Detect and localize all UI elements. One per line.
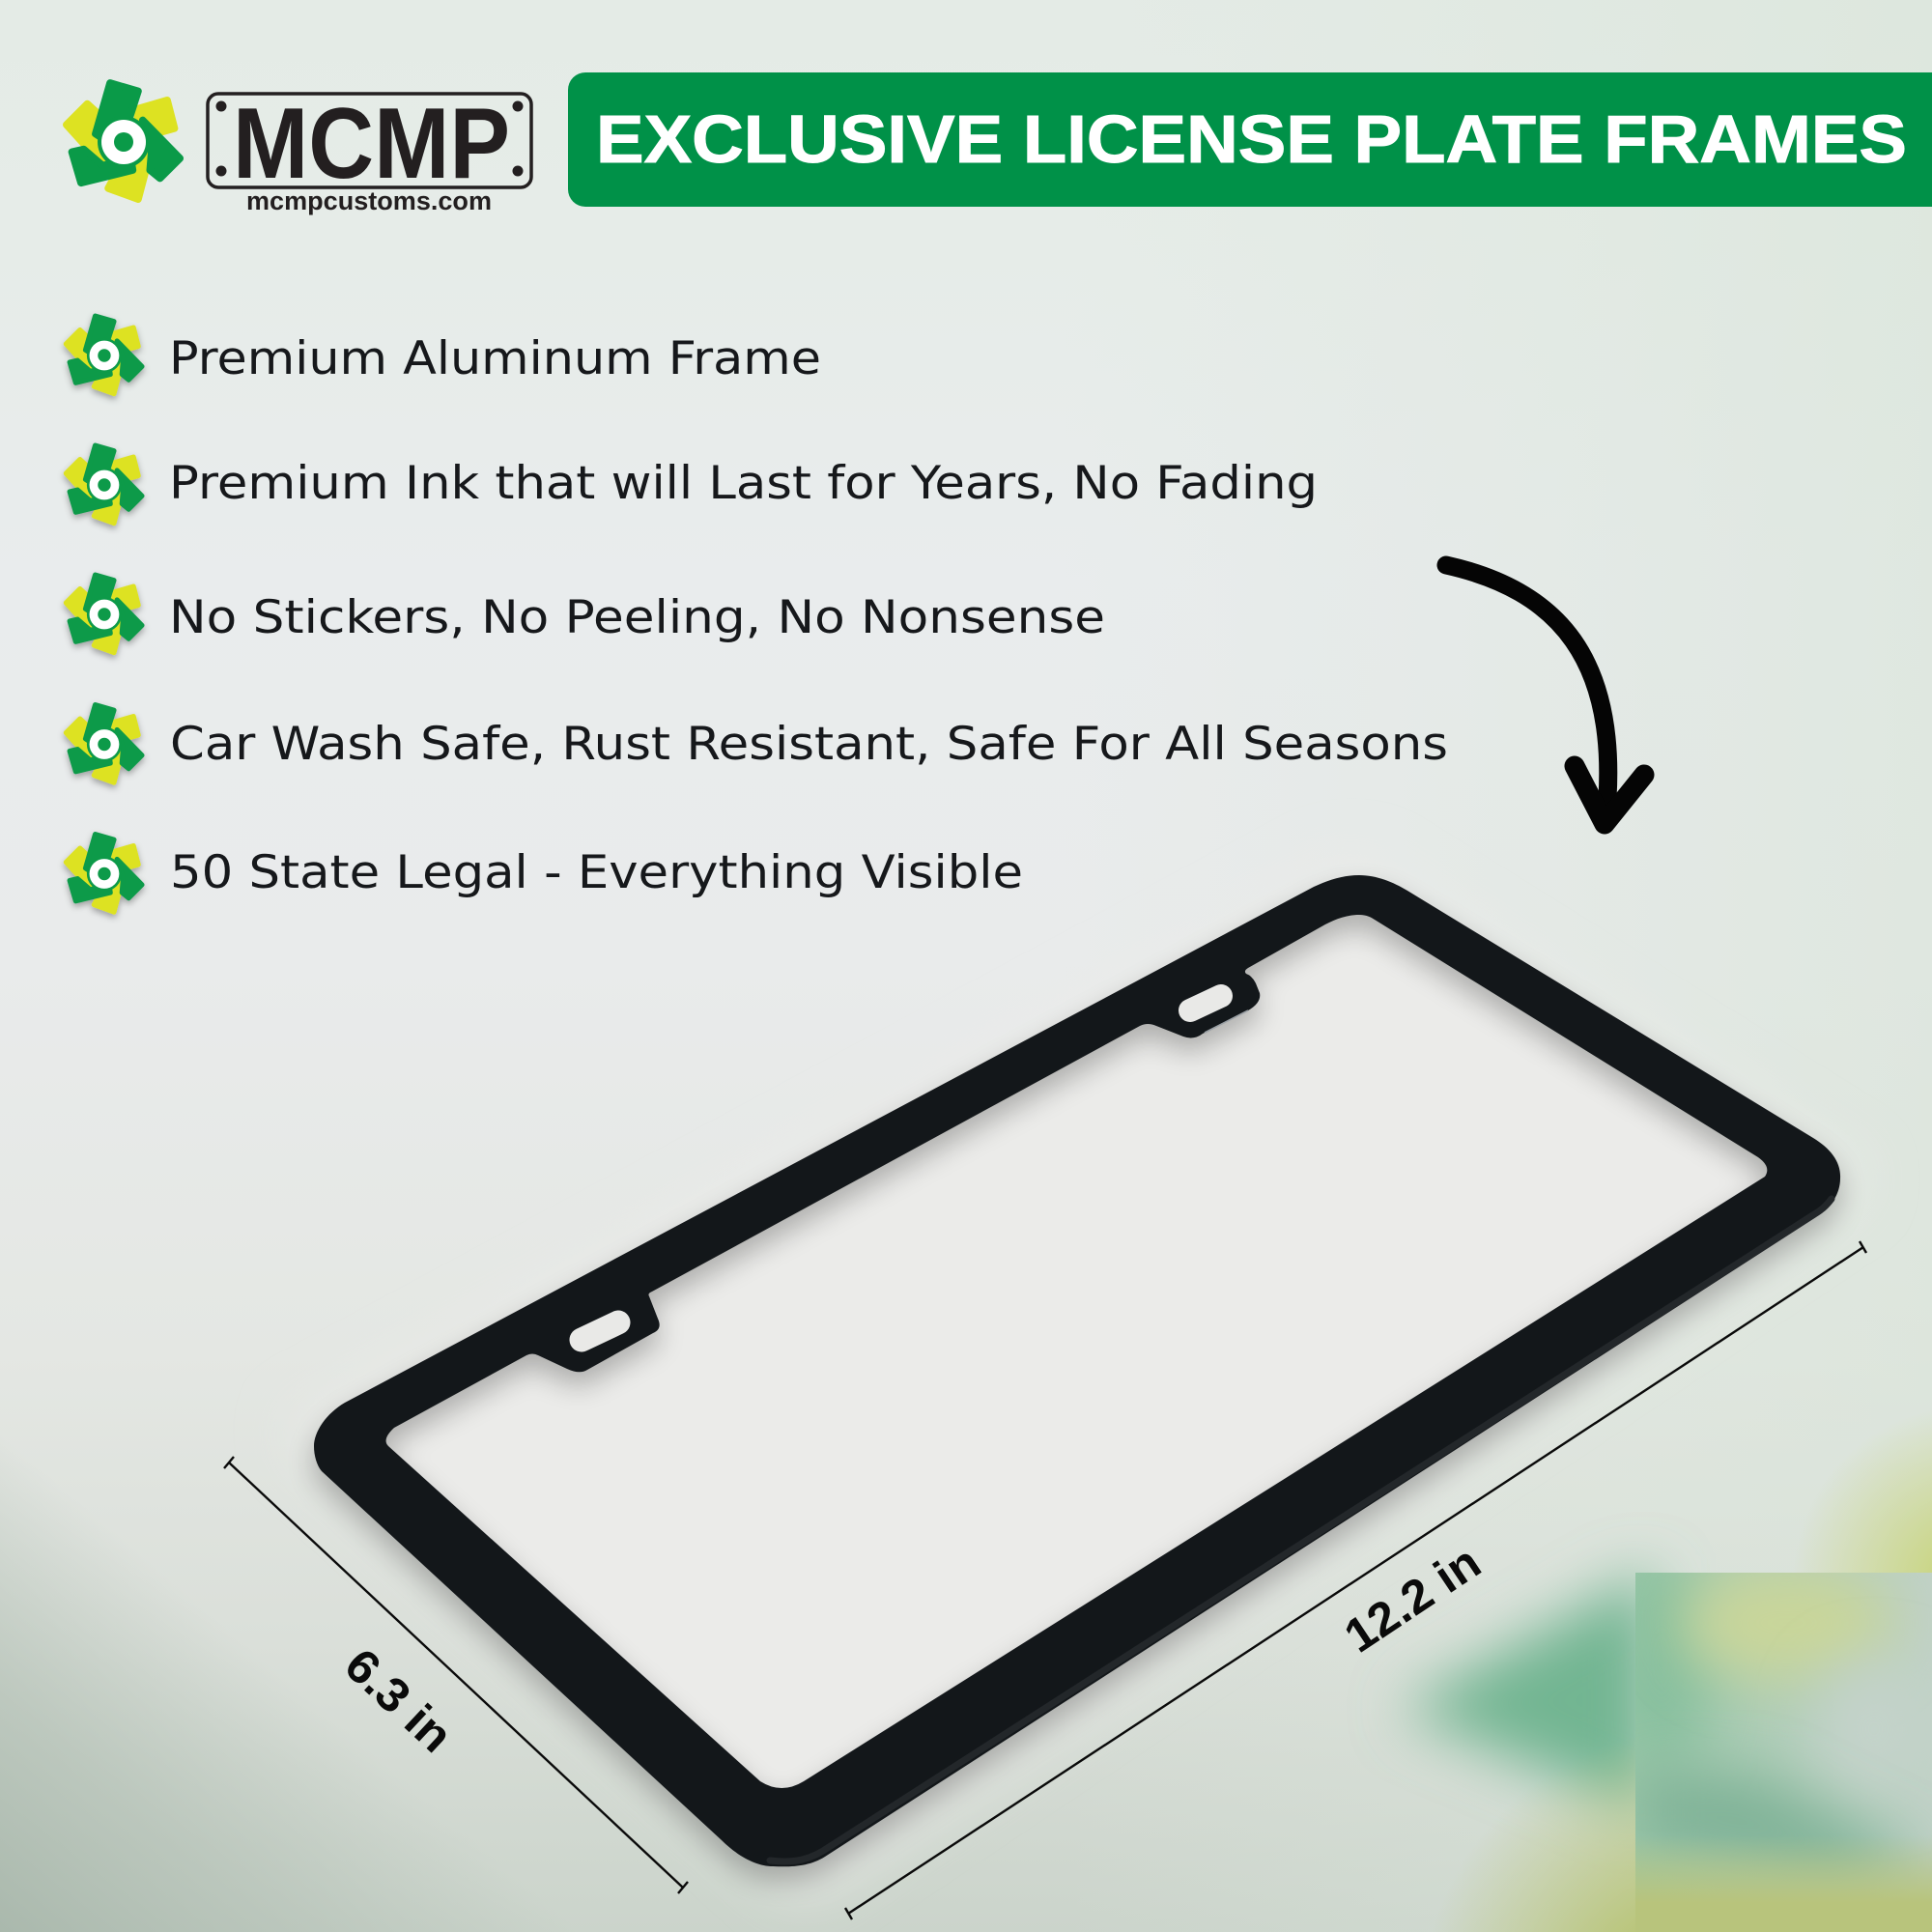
dimension: length xyxy=(845,1241,1866,1919)
title banner xyxy=(568,72,1932,207)
title banner: EXCLUSIVE LICENSE PLATE FRAMES xyxy=(596,101,1907,177)
feature 2 xyxy=(66,445,1318,524)
feature 3 xyxy=(66,575,1105,653)
logo plate: MCMP: MCMP xyxy=(233,88,510,200)
feature 4 xyxy=(66,705,1448,782)
feature 1 xyxy=(66,316,821,394)
logo mark xyxy=(67,83,180,199)
feature 5: 50 State Legal - Everything Visible xyxy=(170,846,1023,899)
feature 5 xyxy=(66,835,1023,912)
frame rim highlight xyxy=(770,1199,1832,1861)
mounting slot right xyxy=(1190,996,1221,1010)
dimension: width xyxy=(224,1457,688,1893)
label: 12.2 in: 12.2 in xyxy=(1336,1536,1490,1663)
arrow xyxy=(1446,565,1644,824)
feature 4: Car Wash Safe, Rust Resistant, Safe For All Seasons xyxy=(170,718,1448,771)
feature 1: Premium Aluminum Frame xyxy=(169,332,821,385)
feature 3: No Stickers, No Peeling, No Nonsense xyxy=(169,591,1105,644)
label: 6.3 in: 6.3 in xyxy=(334,1639,462,1763)
license plate frame xyxy=(314,875,1840,1866)
feature list xyxy=(66,316,1448,912)
mounting slot left xyxy=(582,1322,618,1340)
background colour patch xyxy=(1635,1573,1932,1932)
feature 2: Premium Ink that will Last for Years, No Fading xyxy=(169,457,1318,510)
frame shadow xyxy=(314,889,1840,1880)
slot edge glint xyxy=(1205,1010,1248,1033)
logo url: mcmpcustoms.com xyxy=(246,186,492,215)
background colour blobs xyxy=(1391,1304,1932,1932)
